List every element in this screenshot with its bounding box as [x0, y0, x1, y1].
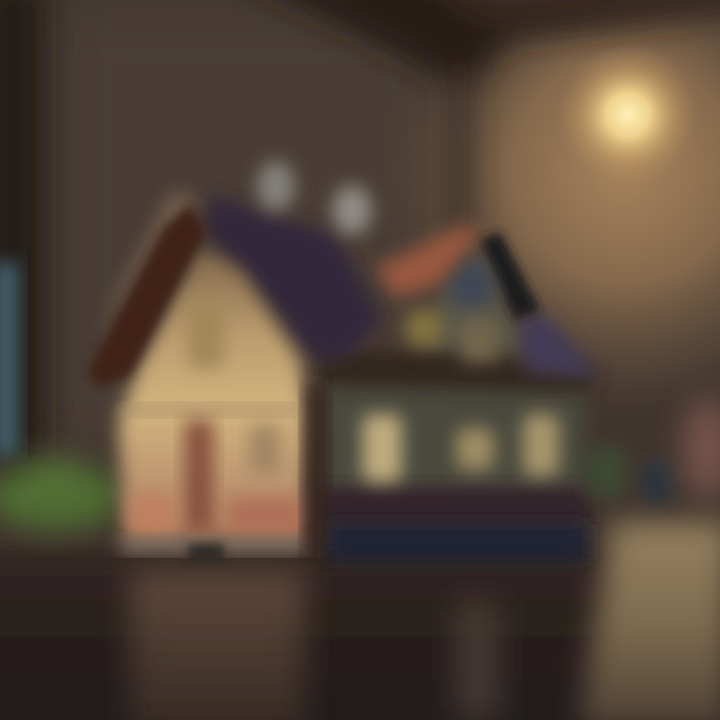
gable wall [420, 262, 530, 355]
reflection: light on right floor [578, 522, 720, 720]
side shadow [306, 385, 326, 550]
ceiling beams and dark left post [0, 0, 720, 460]
dark gable roof [478, 232, 540, 320]
reflection: middle glow [455, 600, 500, 720]
roof eave dark band [320, 350, 600, 392]
gable wall [118, 248, 308, 540]
background objects: right green and blue blur [584, 444, 673, 504]
accent: blue stripe at left edge [0, 262, 18, 457]
right purple roof [520, 310, 603, 378]
wing navy foundation [326, 524, 588, 560]
roof highlight trim [100, 192, 200, 345]
bush: green foliage left [0, 458, 123, 529]
attic window shade [188, 300, 224, 368]
house: main cream gable [88, 192, 326, 562]
dark door step [188, 544, 224, 562]
background object: pink vase [682, 396, 720, 500]
roof vents: two white chimneys [257, 161, 372, 235]
wing base dark band [318, 488, 590, 522]
floor: dark reflective surface [0, 522, 720, 720]
windows [362, 310, 559, 482]
door [185, 420, 213, 532]
house: right grey wing [318, 224, 603, 560]
orange roof [375, 224, 480, 298]
brick base right [228, 498, 302, 534]
blue gable shadow [445, 250, 498, 312]
house: main purple roof [205, 195, 382, 360]
light: glowing ceiling lamp [556, 43, 700, 187]
wing wall [325, 370, 585, 500]
foundation steps [120, 538, 305, 552]
roof dark brown edge [88, 205, 205, 388]
right lower window [250, 425, 280, 475]
horizontal band [122, 405, 302, 415]
reflection: house wall [130, 570, 305, 720]
brick base left [130, 495, 176, 533]
